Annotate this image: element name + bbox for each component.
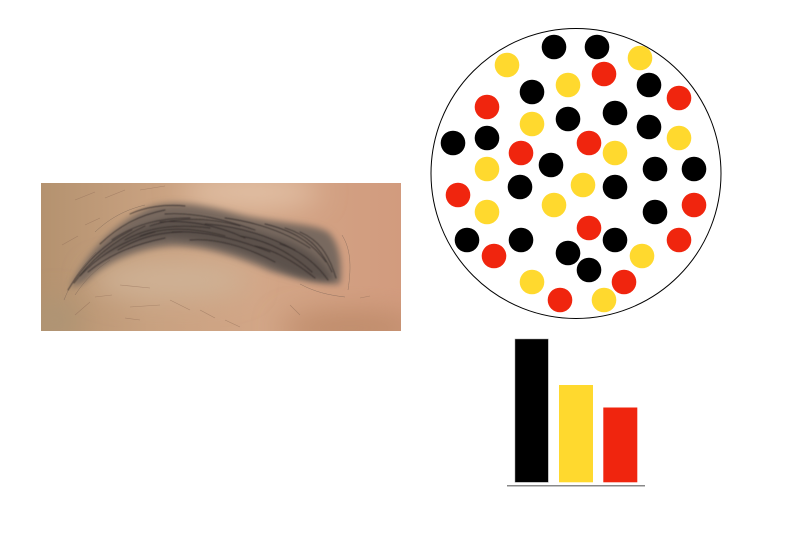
red dots xyxy=(446,62,706,312)
bar: red xyxy=(603,408,637,482)
black dots xyxy=(441,35,706,282)
yellow dots xyxy=(475,46,691,312)
stray hairs xyxy=(62,186,370,327)
circle outline xyxy=(431,28,721,318)
photo: eyebrow close-up xyxy=(41,183,401,331)
eyebrow xyxy=(64,203,350,300)
bar: yellow xyxy=(559,385,593,482)
circle of coloured dots xyxy=(431,28,721,318)
bar chart xyxy=(507,339,645,486)
bar: black xyxy=(515,339,548,482)
axis line xyxy=(507,485,645,486)
